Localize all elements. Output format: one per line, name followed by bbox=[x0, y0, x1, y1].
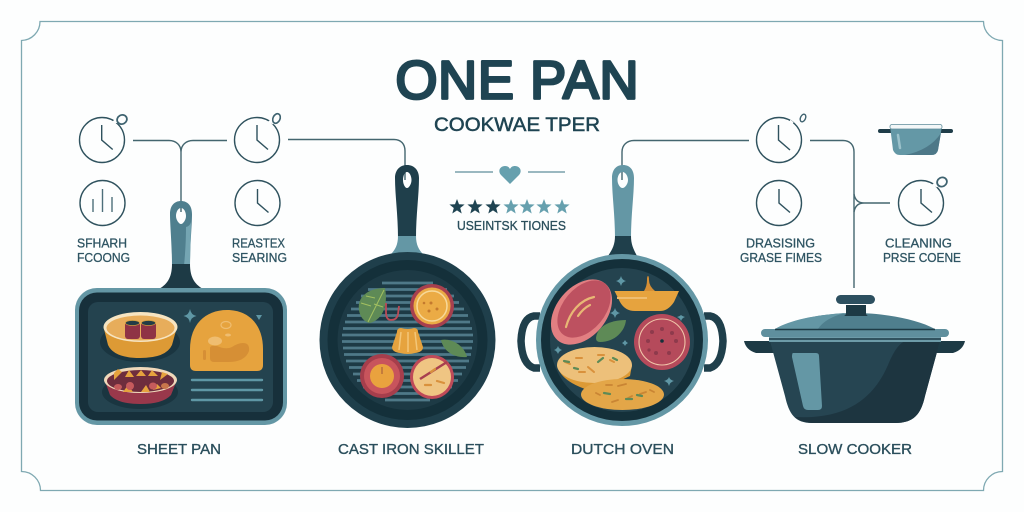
food: orange slice bbox=[410, 284, 454, 328]
panel: slow cooker bbox=[744, 295, 965, 423]
icon: small pot bbox=[878, 124, 953, 155]
food: large pie bbox=[557, 347, 632, 390]
food: orange dish bbox=[100, 312, 180, 362]
red hook bbox=[386, 303, 399, 320]
icon: clock far right bbox=[898, 176, 949, 226]
sparkle stars bbox=[554, 276, 685, 386]
icon: clock top right bbox=[756, 113, 807, 162]
sparkle stars bbox=[184, 309, 262, 323]
food: golden dome bbox=[190, 310, 263, 371]
rating caption: USEINTSK TIONES bbox=[457, 219, 566, 233]
labels: left column one: FCOONG bbox=[77, 250, 130, 265]
dutch oven label: DUTCH OVEN bbox=[571, 441, 674, 458]
icon: clock top second bbox=[234, 112, 282, 162]
sheet pan label: SHEET PAN bbox=[137, 441, 221, 458]
food: gold bowl bbox=[614, 276, 679, 311]
food: red slice bbox=[360, 354, 404, 398]
connector lines bbox=[133, 140, 890, 288]
leaf bbox=[359, 288, 386, 323]
oven body bbox=[536, 254, 708, 426]
food: bundt cake bbox=[392, 328, 423, 354]
slow cooker label: SLOW COOKER bbox=[798, 441, 912, 458]
side handles bbox=[521, 316, 723, 368]
grill ridges bbox=[342, 283, 473, 400]
icon: clock top left bbox=[80, 113, 129, 162]
panel: sheet pan bbox=[75, 201, 287, 425]
labels: left column one: SFHARH bbox=[77, 236, 127, 250]
handles bbox=[744, 341, 965, 353]
labels: right column one: DRASISING bbox=[746, 236, 815, 250]
labels: left column one bbox=[77, 236, 130, 265]
skillet body bbox=[320, 252, 496, 428]
star rating bbox=[449, 199, 570, 213]
highlight bbox=[792, 353, 822, 410]
icon: clock lower centre right bbox=[756, 180, 802, 226]
small leaf bbox=[441, 340, 467, 357]
labels: right column two: PRSE COENE bbox=[883, 250, 961, 265]
food: red tart bbox=[102, 367, 178, 409]
icon: clock second row bbox=[235, 180, 280, 226]
food: beige slice bbox=[410, 355, 454, 399]
skillet label: CAST IRON SKILLET bbox=[338, 441, 484, 458]
dutch oven handle bbox=[612, 165, 634, 238]
skillet handle bbox=[395, 165, 419, 238]
food: sausage slice bbox=[634, 314, 690, 370]
text lines bbox=[192, 380, 262, 400]
labels: left column two bbox=[232, 236, 287, 265]
panel: dutch oven bbox=[521, 165, 723, 426]
icon: bars dial bbox=[80, 180, 125, 226]
food: flat pie bbox=[581, 379, 664, 410]
labels: left column two: SEARING bbox=[232, 250, 287, 265]
labels: right column one: GRASE FIMES bbox=[740, 250, 822, 265]
labels: left column two: REASTEX bbox=[232, 236, 285, 250]
leaf bbox=[596, 320, 626, 342]
labels: right column one bbox=[740, 236, 822, 265]
pot body bbox=[770, 341, 940, 423]
labels: right column two: CLEANING bbox=[885, 236, 952, 250]
labels: right column two bbox=[883, 236, 961, 265]
sheet pan handle bbox=[170, 201, 192, 266]
food: ham bbox=[539, 268, 624, 356]
subtitle: COOKWAE TPER bbox=[434, 115, 600, 136]
panel: cast iron skillet bbox=[320, 165, 496, 428]
lid bbox=[775, 313, 935, 329]
title: ONE PAN bbox=[396, 50, 638, 110]
heart divider bbox=[455, 166, 565, 184]
pan body bbox=[75, 288, 287, 425]
knob bbox=[844, 305, 868, 316]
